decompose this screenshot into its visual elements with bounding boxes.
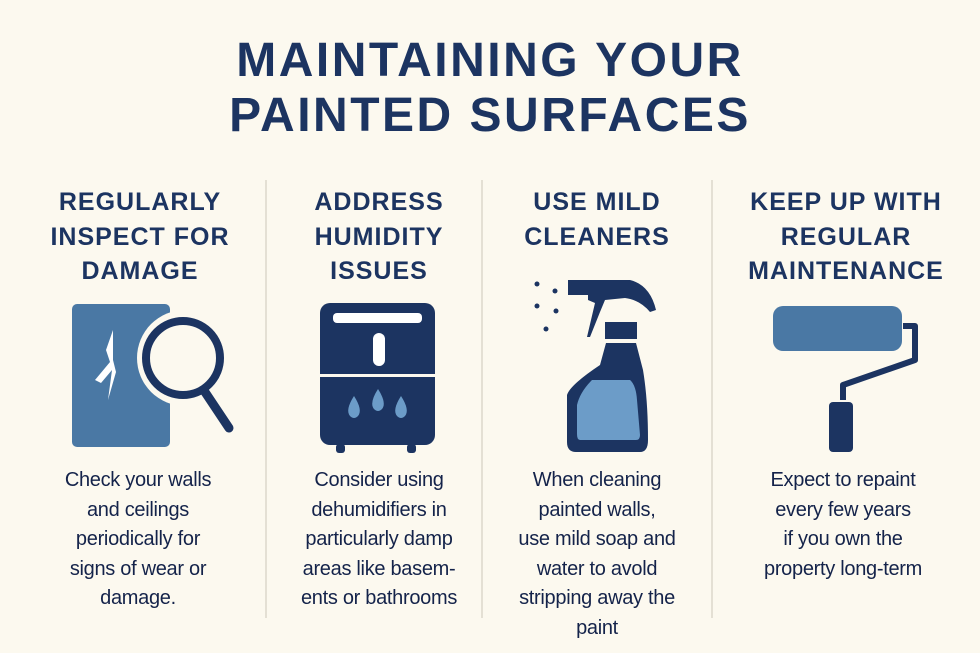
heading: maintenance: KEEP UP WITH	[750, 188, 942, 216]
text: cleaners: stripping away the	[519, 587, 675, 609]
text: cleaners: use mild soap and	[518, 528, 676, 550]
text: inspect: Check your walls	[65, 469, 211, 491]
text: maintenance: Expect to repaint	[770, 469, 916, 491]
text: cleaners	[518, 469, 676, 638]
title: MAINTAINING YOUR	[236, 34, 744, 87]
text: maintenance: if you own the	[783, 528, 903, 550]
text: humidity: particularly damp	[305, 528, 453, 550]
text: maintenance: property long-term	[764, 558, 922, 580]
title	[229, 34, 751, 142]
heading: cleaners: USE MILD	[533, 188, 661, 216]
heading: humidity	[314, 188, 444, 285]
text: maintenance: every few years	[775, 498, 911, 520]
text: cleaners: When cleaning	[533, 469, 661, 491]
icon: paint roller	[773, 306, 915, 452]
text: humidity: ents or bathrooms	[301, 587, 457, 609]
text: cleaners: water to avold	[537, 558, 657, 580]
text: maintenance	[764, 469, 922, 580]
text: inspect: and ceilings	[87, 498, 189, 520]
heading: inspect: DAMAGE	[81, 257, 199, 285]
text: inspect: damage.	[100, 587, 176, 609]
text: humidity: areas like basem-	[303, 558, 455, 580]
text: humidity: dehumidifiers in	[311, 498, 447, 520]
heading: cleaners	[524, 188, 670, 250]
text: humidity: Consider using	[314, 469, 444, 491]
text: inspect	[65, 469, 211, 609]
heading: inspect: INSPECT FOR	[50, 222, 230, 250]
heading: cleaners: CLEANERS	[524, 222, 670, 250]
text: inspect: periodically for	[76, 528, 200, 550]
icon: spray bottle	[534, 280, 656, 452]
text: humidity	[301, 469, 457, 609]
heading: inspect: REGULARLY	[59, 188, 221, 216]
heading: inspect	[50, 188, 230, 285]
heading: humidity: ISSUES	[330, 257, 428, 285]
text: cleaners: painted walls,	[538, 498, 655, 520]
heading: maintenance: REGULAR	[781, 222, 911, 250]
heading: maintenance: MAINTENANCE	[748, 257, 944, 285]
heading: humidity: HUMIDITY	[315, 222, 443, 250]
icon: cracked wall with magnifier	[72, 304, 233, 447]
text: inspect: signs of wear or	[70, 558, 206, 580]
icon: dehumidifier	[320, 303, 435, 453]
text: cleaners: paint	[576, 616, 618, 638]
heading: humidity: ADDRESS	[314, 188, 444, 216]
title: PAINTED SURFACES	[229, 89, 751, 142]
heading: maintenance	[748, 188, 944, 285]
